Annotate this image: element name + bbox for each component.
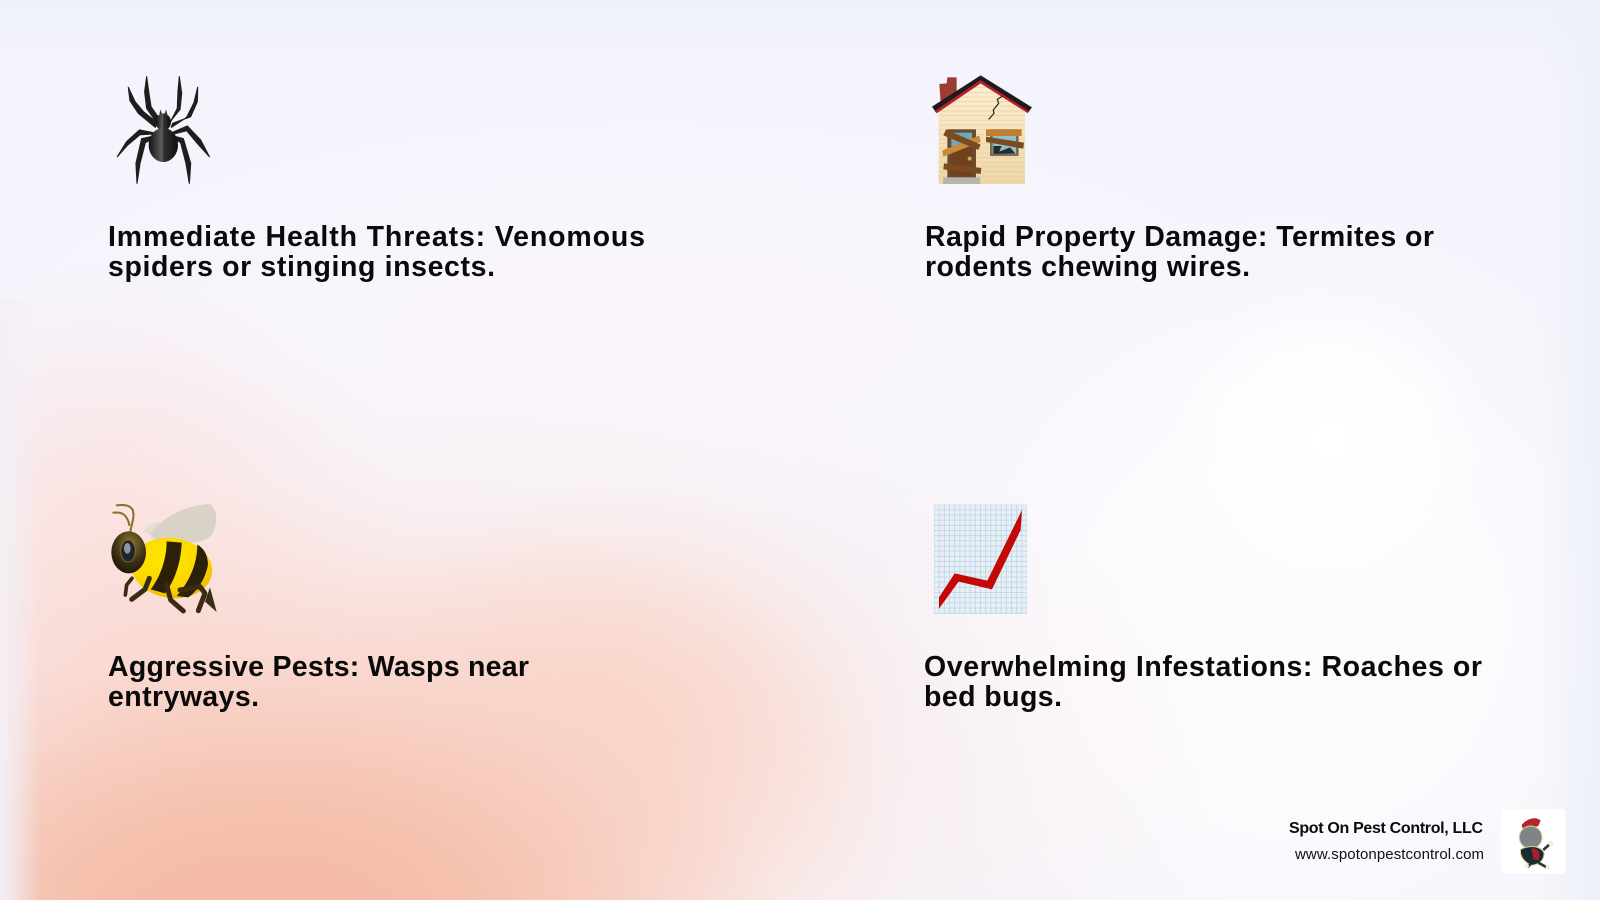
heading: rapid property damage: Rapid Property Damage: Termites or xyxy=(925,221,1434,253)
icon: bee xyxy=(111,504,217,612)
card: aggressive pests xyxy=(108,504,529,713)
logo: mascot xyxy=(1501,809,1566,874)
company name: Spot On Pest Control, LLC xyxy=(1289,820,1483,837)
heading: aggressive pests: Aggressive Pests: Wasps near xyxy=(108,651,529,683)
heading: immediate health threats: spiders or stinging insects. xyxy=(108,251,495,283)
heading: immediate health threats: Immediate Health Threats: Venomous xyxy=(108,221,645,253)
heading: rapid property damage: rodents chewing wires. xyxy=(925,251,1250,283)
card: overwhelming infestations xyxy=(924,505,1482,713)
icon: damaged house xyxy=(932,75,1032,184)
website url: www.spotonpestcontrol.com xyxy=(1294,846,1484,863)
card: immediate health threats xyxy=(108,77,645,283)
icon: spider xyxy=(117,77,209,183)
heading: overwhelming infestations: bed bugs. xyxy=(924,681,1062,713)
heading: aggressive pests: entryways. xyxy=(108,681,259,713)
heading: overwhelming infestations: Overwhelming Infestations: Roaches or xyxy=(924,651,1482,683)
icon: rising chart xyxy=(934,505,1027,614)
card: rapid property damage xyxy=(925,75,1434,283)
footer: company branding xyxy=(1289,809,1566,874)
